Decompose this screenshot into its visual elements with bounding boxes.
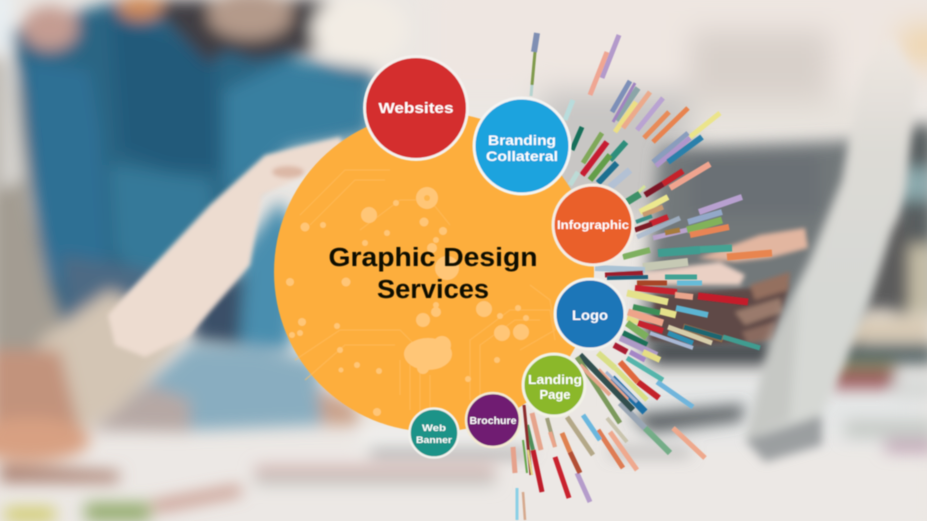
circle: Landing Page: Page	[540, 388, 571, 402]
fingers right	[698, 228, 808, 262]
circle: Branding Collateral: Branding	[488, 133, 556, 148]
shirt	[12, 0, 375, 340]
main orange circle	[274, 112, 594, 432]
title	[328, 244, 538, 304]
circle: Websites: Websites	[378, 100, 454, 117]
circle: Brochure: Brochure	[470, 416, 517, 427]
circle: Infographic	[553, 185, 633, 265]
circle: Brochure	[466, 393, 520, 447]
circle: Websites	[364, 56, 468, 160]
keyboard and laptop on desk	[630, 405, 745, 432]
circle: Web Banner: Web	[422, 423, 446, 434]
circle: Web Banner	[410, 408, 458, 458]
circle: Landing Page: Landing	[528, 373, 582, 387]
title: Graphic Design	[328, 244, 538, 272]
circle: Logo: Logo	[572, 307, 608, 323]
left person sweater	[0, 54, 70, 360]
hand on shoulder	[22, 6, 78, 50]
circle: Web Banner: Banner	[416, 435, 452, 446]
circle: Branding Collateral: Collateral	[486, 149, 558, 164]
laptop screen	[773, 46, 918, 423]
circle: Branding Collateral	[474, 98, 570, 194]
right-hand background objects	[895, 125, 927, 315]
neck, beard, hair	[150, 0, 330, 65]
circle: Infographic: Infographic	[557, 218, 629, 232]
radiating colored bars	[513, 33, 772, 520]
circle: Landing Page	[523, 354, 585, 416]
blue sleeve	[95, 345, 322, 430]
circle: Logo	[555, 279, 625, 349]
title: Services	[377, 276, 489, 304]
forearm	[108, 137, 345, 357]
table objects	[255, 466, 495, 475]
circuit pattern decorations	[286, 170, 555, 420]
grey panel behind hands	[640, 140, 860, 350]
